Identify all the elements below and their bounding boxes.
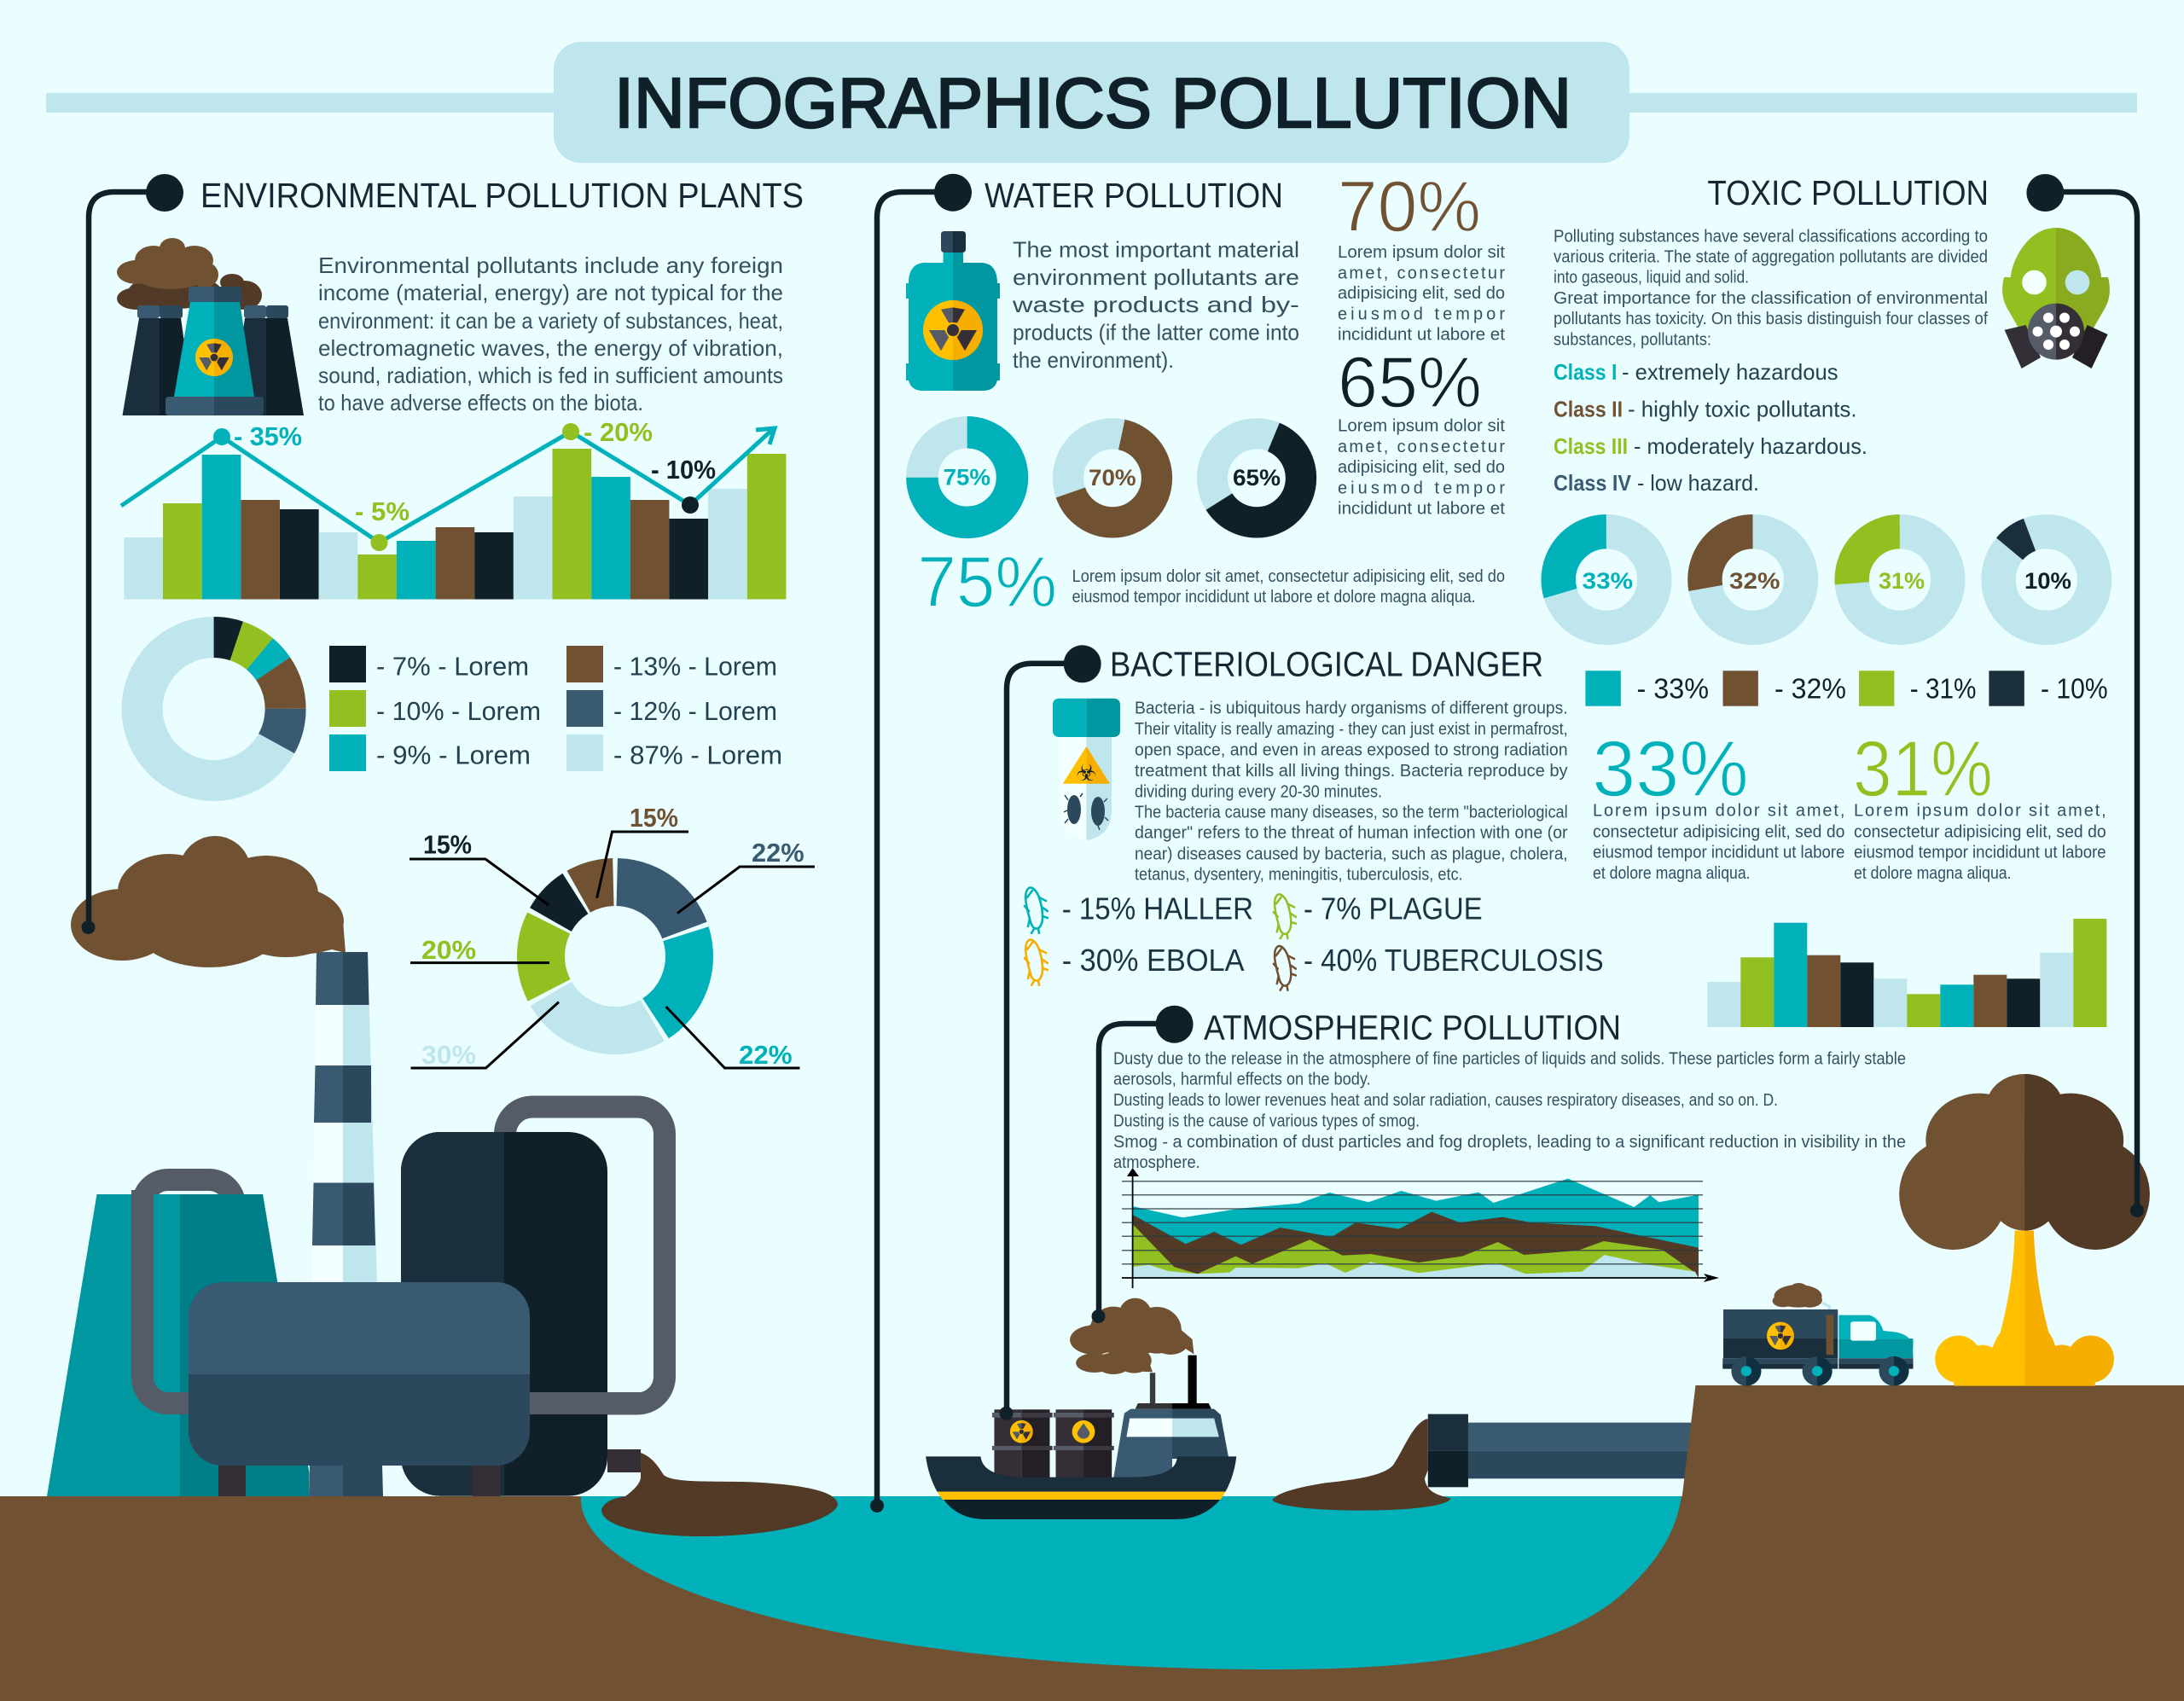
donut: 32% xyxy=(1705,531,1801,628)
scene: factory spill xyxy=(601,1453,838,1536)
class list: Class III xyxy=(1554,433,1628,459)
scene: cliff xyxy=(1682,1385,2184,1501)
stat: 70%: Lorem ipsum dolor sit xyxy=(1338,243,1505,262)
stat: 65%: amet, consectetur xyxy=(1338,438,1505,456)
text block: dividing during every 20-30 minutes. xyxy=(1135,782,1382,801)
donut chart xyxy=(142,637,286,781)
barrels xyxy=(992,1409,1114,1477)
segmented donut chart: 22% xyxy=(752,838,804,868)
text block: the environment). xyxy=(1013,347,1174,373)
text block: various criteria. The state of aggregation pollutants are divided xyxy=(1554,247,1988,266)
legend: - 33% xyxy=(1636,673,1709,705)
text block xyxy=(1554,227,1988,350)
icon: toxic bottle xyxy=(906,231,1000,391)
class list: Class II xyxy=(1554,396,1623,421)
stat: 75%: Lorem ipsum dolor sit amet, consectetur adipisicing elit, sed do xyxy=(1072,567,1505,586)
title: INFOGRAPHICS POLLUTION xyxy=(614,63,1571,142)
connector: atmospheric pollution xyxy=(1092,1006,1194,1323)
scene: ship xyxy=(926,1298,1236,1519)
area chart xyxy=(1122,1168,1719,1288)
connector: bacteriological danger xyxy=(1000,645,1101,1420)
text block: environment: it can be a variety of substances, heat, xyxy=(318,308,783,334)
bar chart xyxy=(1707,919,2106,1027)
legend: - 87% - Lorem xyxy=(613,740,782,769)
trend line with arrow: - 35% xyxy=(234,421,302,451)
donut: 75%: 75% xyxy=(944,465,990,491)
donut: 75% xyxy=(922,433,1012,522)
class list: Class I xyxy=(1554,359,1617,385)
text block: The bacteria cause many diseases, so the term "bacteriological xyxy=(1135,803,1568,821)
text block: sound, radiation, which is fed in sufficient amounts xyxy=(318,363,783,388)
text block: into gaseous, liquid and solid. xyxy=(1554,268,1749,287)
mushroom cloud xyxy=(1899,1074,2150,1250)
class list: - moderately hazardous. xyxy=(1634,433,1867,459)
class list: - extremely hazardous xyxy=(1622,359,1838,385)
stat: 65%: 65% xyxy=(1338,342,1482,422)
donut: 32%: 32% xyxy=(1729,568,1780,594)
stat: 31%: et dolore magna aliqua. xyxy=(1854,864,2012,883)
text block: aerosols, harmful effects on the body. xyxy=(1113,1071,1371,1089)
stat: 75% xyxy=(918,542,1505,622)
donut: 33% xyxy=(1559,531,1654,628)
text block: to have adverse effects on the biota. xyxy=(318,390,643,415)
text block: Dusting leads to lower revenues heat and solar radiation, causes respiratory diseases, and so on. D. xyxy=(1113,1091,1778,1110)
text block xyxy=(1135,700,1568,884)
text block: Their vitality is really amazing - they can just exist in permafrost, xyxy=(1135,720,1568,739)
legend: - 32% xyxy=(1774,673,1846,705)
disease legend: - 40% TUBERCULOSIS xyxy=(1304,943,1604,978)
trend line with arrow: - 20% xyxy=(584,417,653,447)
stat: 31% xyxy=(1853,724,2106,883)
donut: 65% xyxy=(1212,433,1301,522)
text block: atmosphere. xyxy=(1113,1153,1200,1172)
text block xyxy=(318,253,783,415)
ship smoke xyxy=(1070,1298,1194,1374)
stat: 31%: 31% xyxy=(1853,724,1993,813)
panel: atmospheric pollution xyxy=(1113,1008,1906,1288)
text block: treatment that kills all living things. Bacteria reproduce by xyxy=(1135,762,1568,781)
text block: products (if the latter come into xyxy=(1013,320,1299,345)
stat: 33%: Lorem ipsum dolor sit amet, xyxy=(1593,802,1844,821)
icon: gas mask xyxy=(2002,228,2110,369)
panel: bacteriological danger xyxy=(1025,645,1604,990)
segmented donut chart: 22% xyxy=(739,1040,793,1070)
legend: - 31% xyxy=(1910,673,1976,705)
text block: The most important material xyxy=(1013,236,1299,262)
panel: environmental pollution plants xyxy=(117,176,815,1070)
chimney xyxy=(309,952,383,1496)
text block xyxy=(1113,1049,1906,1172)
text block xyxy=(1012,236,1299,373)
legend xyxy=(1585,671,2108,706)
legend: - 7% - Lorem xyxy=(376,652,529,681)
segmented donut chart: 20% xyxy=(421,935,476,965)
stat: 31%: Lorem ipsum dolor sit amet, xyxy=(1854,802,2106,821)
donut: 70% xyxy=(1068,433,1157,522)
scene: ground and water xyxy=(0,1385,2184,1701)
donut: 70%: 70% xyxy=(1089,465,1136,491)
stat: 33% xyxy=(1592,724,1844,883)
stat: 70%: amet, consectetur xyxy=(1338,264,1505,282)
stat: 65%: eiusmod tempor xyxy=(1338,479,1505,498)
text block: open space, and even in areas exposed to strong radiation xyxy=(1135,741,1568,760)
heading: BACTERIOLOGICAL DANGER xyxy=(1110,645,1543,684)
text block: Great importance for the classification of environmental xyxy=(1554,289,1988,308)
connector: toxic pollution xyxy=(2026,174,2144,1217)
segmented donut chart: 15% xyxy=(630,803,678,833)
donut: 10%: 10% xyxy=(2024,568,2071,594)
disease legend: - 30% EBOLA xyxy=(1062,943,1245,978)
donut: 31%: 31% xyxy=(1879,568,1925,594)
stat: 75%: eiusmod tempor incididunt ut labore et dolore magna aliqua. xyxy=(1072,588,1476,607)
stat: 33%: et dolore magna aliqua. xyxy=(1593,864,1751,883)
stat: 33%: eiusmod tempor incididunt ut labore xyxy=(1593,844,1844,862)
segmented donut chart: 15% xyxy=(423,829,472,859)
class list: - highly toxic pollutants. xyxy=(1628,396,1856,421)
legend: - 9% - Lorem xyxy=(376,740,531,769)
slate tank xyxy=(189,1282,530,1466)
text block: Dusting is the cause of various types of smog. xyxy=(1113,1112,1420,1131)
drain pipe xyxy=(607,1449,641,1472)
text block: Smog - a combination of dust particles and fog droplets, leading to a significant reduction in visibility in the xyxy=(1113,1133,1906,1152)
text block: Polluting substances have several classifications according to xyxy=(1554,227,1988,246)
stat: 70% xyxy=(1338,166,1505,345)
stat: 70%: 70% xyxy=(1338,166,1481,247)
legend: - 12% - Lorem xyxy=(613,696,777,726)
heading: ATMOSPHERIC POLLUTION xyxy=(1204,1008,1621,1048)
heading: WATER POLLUTION xyxy=(985,176,1283,215)
text block: Dusty due to the release in the atmosphere of fine particles of liquids and solids. These particles form a fairly stable xyxy=(1113,1049,1906,1068)
text block: Bacteria - is ubiquitous hardy organisms of different groups. xyxy=(1135,700,1568,718)
stat: 65%: adipisicing elit, sed do xyxy=(1338,458,1505,477)
donut: 33%: 33% xyxy=(1583,568,1633,594)
heading: ENVIRONMENTAL POLLUTION PLANTS xyxy=(200,176,804,215)
text block: near) diseases caused by bacteria, such as plague, cholera, xyxy=(1135,845,1568,863)
blast stem xyxy=(1935,1231,2114,1386)
connector: environmental pollution plants xyxy=(82,174,183,934)
segmented donut chart xyxy=(410,803,815,1070)
text block: danger" refers to the threat of human infection with one (or xyxy=(1135,824,1568,843)
disease legend: - 15% HALLER xyxy=(1062,891,1253,926)
class list xyxy=(1554,359,1867,496)
text block: waste products and by- xyxy=(1012,292,1299,317)
hull xyxy=(926,1456,1236,1492)
icon: nuclear plant xyxy=(117,238,304,415)
donut: 10% xyxy=(1998,531,2094,628)
scene: outflow pipe xyxy=(1272,1414,1702,1511)
heading: TOXIC POLLUTION xyxy=(1707,173,1989,212)
dark tank xyxy=(401,1132,607,1496)
text block: environment pollutants are xyxy=(1013,264,1299,290)
scene: big smoke cloud xyxy=(71,836,346,967)
text block: income (material, energy) are not typical for the xyxy=(318,280,783,305)
stat: 65%: incididunt ut labore et xyxy=(1338,500,1505,519)
panel: water pollution xyxy=(906,166,1505,622)
bar chart xyxy=(124,449,786,599)
trend line with arrow xyxy=(121,417,775,551)
segmented donut chart: 30% xyxy=(421,1040,476,1070)
text block: substances, pollutants: xyxy=(1554,331,1711,350)
disease legend: - 7% PLAGUE xyxy=(1304,891,1483,926)
class list: - low hazard. xyxy=(1637,470,1759,496)
trend line with arrow: - 5% xyxy=(355,496,410,526)
stat: 33%: 33% xyxy=(1592,724,1749,813)
stat: 65% xyxy=(1338,342,1505,519)
stat: 70%: eiusmod tempor xyxy=(1338,305,1505,324)
donut: 65%: 65% xyxy=(1233,465,1281,491)
text block: Environmental pollutants include any foreign xyxy=(318,253,783,278)
stat: 70%: adipisicing elit, sed do xyxy=(1338,284,1505,303)
scene: explosion xyxy=(1899,1074,2150,1386)
icon: test tube xyxy=(1053,699,1120,840)
class list: Class IV xyxy=(1554,470,1632,496)
legend: - 13% - Lorem xyxy=(613,652,777,681)
scene: truck xyxy=(1722,1283,1914,1386)
donut: 31% xyxy=(1852,531,1948,628)
icon: test tube: ☣ xyxy=(1076,760,1097,787)
scene: factory xyxy=(47,952,665,1496)
legend: - 10% xyxy=(2041,673,2108,705)
connector: water pollution xyxy=(870,174,972,1512)
legend xyxy=(329,646,782,771)
text block: electromagnetic waves, the energy of vibration, xyxy=(318,335,783,361)
stat: 65%: Lorem ipsum dolor sit xyxy=(1338,417,1505,436)
stat: 31%: eiusmod tempor incididunt ut labore xyxy=(1854,844,2106,862)
text block: tetanus, dysentery, meningitis, tuberculosis, etc. xyxy=(1135,865,1463,884)
header xyxy=(46,42,2137,163)
stat: 70%: incididunt ut labore et xyxy=(1338,326,1505,345)
disease legend xyxy=(1025,888,1604,990)
panel: toxic pollution xyxy=(1554,173,2110,1027)
stat: 31%: consectetur adipisicing elit, sed do xyxy=(1854,822,2106,841)
trend line with arrow: - 10% xyxy=(651,455,716,485)
legend: - 10% - Lorem xyxy=(376,696,541,726)
text block: pollutants has toxicity. On this basis distinguish four classes of xyxy=(1554,310,1988,328)
stat: 33%: consectetur adipisicing elit, sed do xyxy=(1593,822,1844,841)
stat: 75%: 75% xyxy=(918,542,1057,622)
